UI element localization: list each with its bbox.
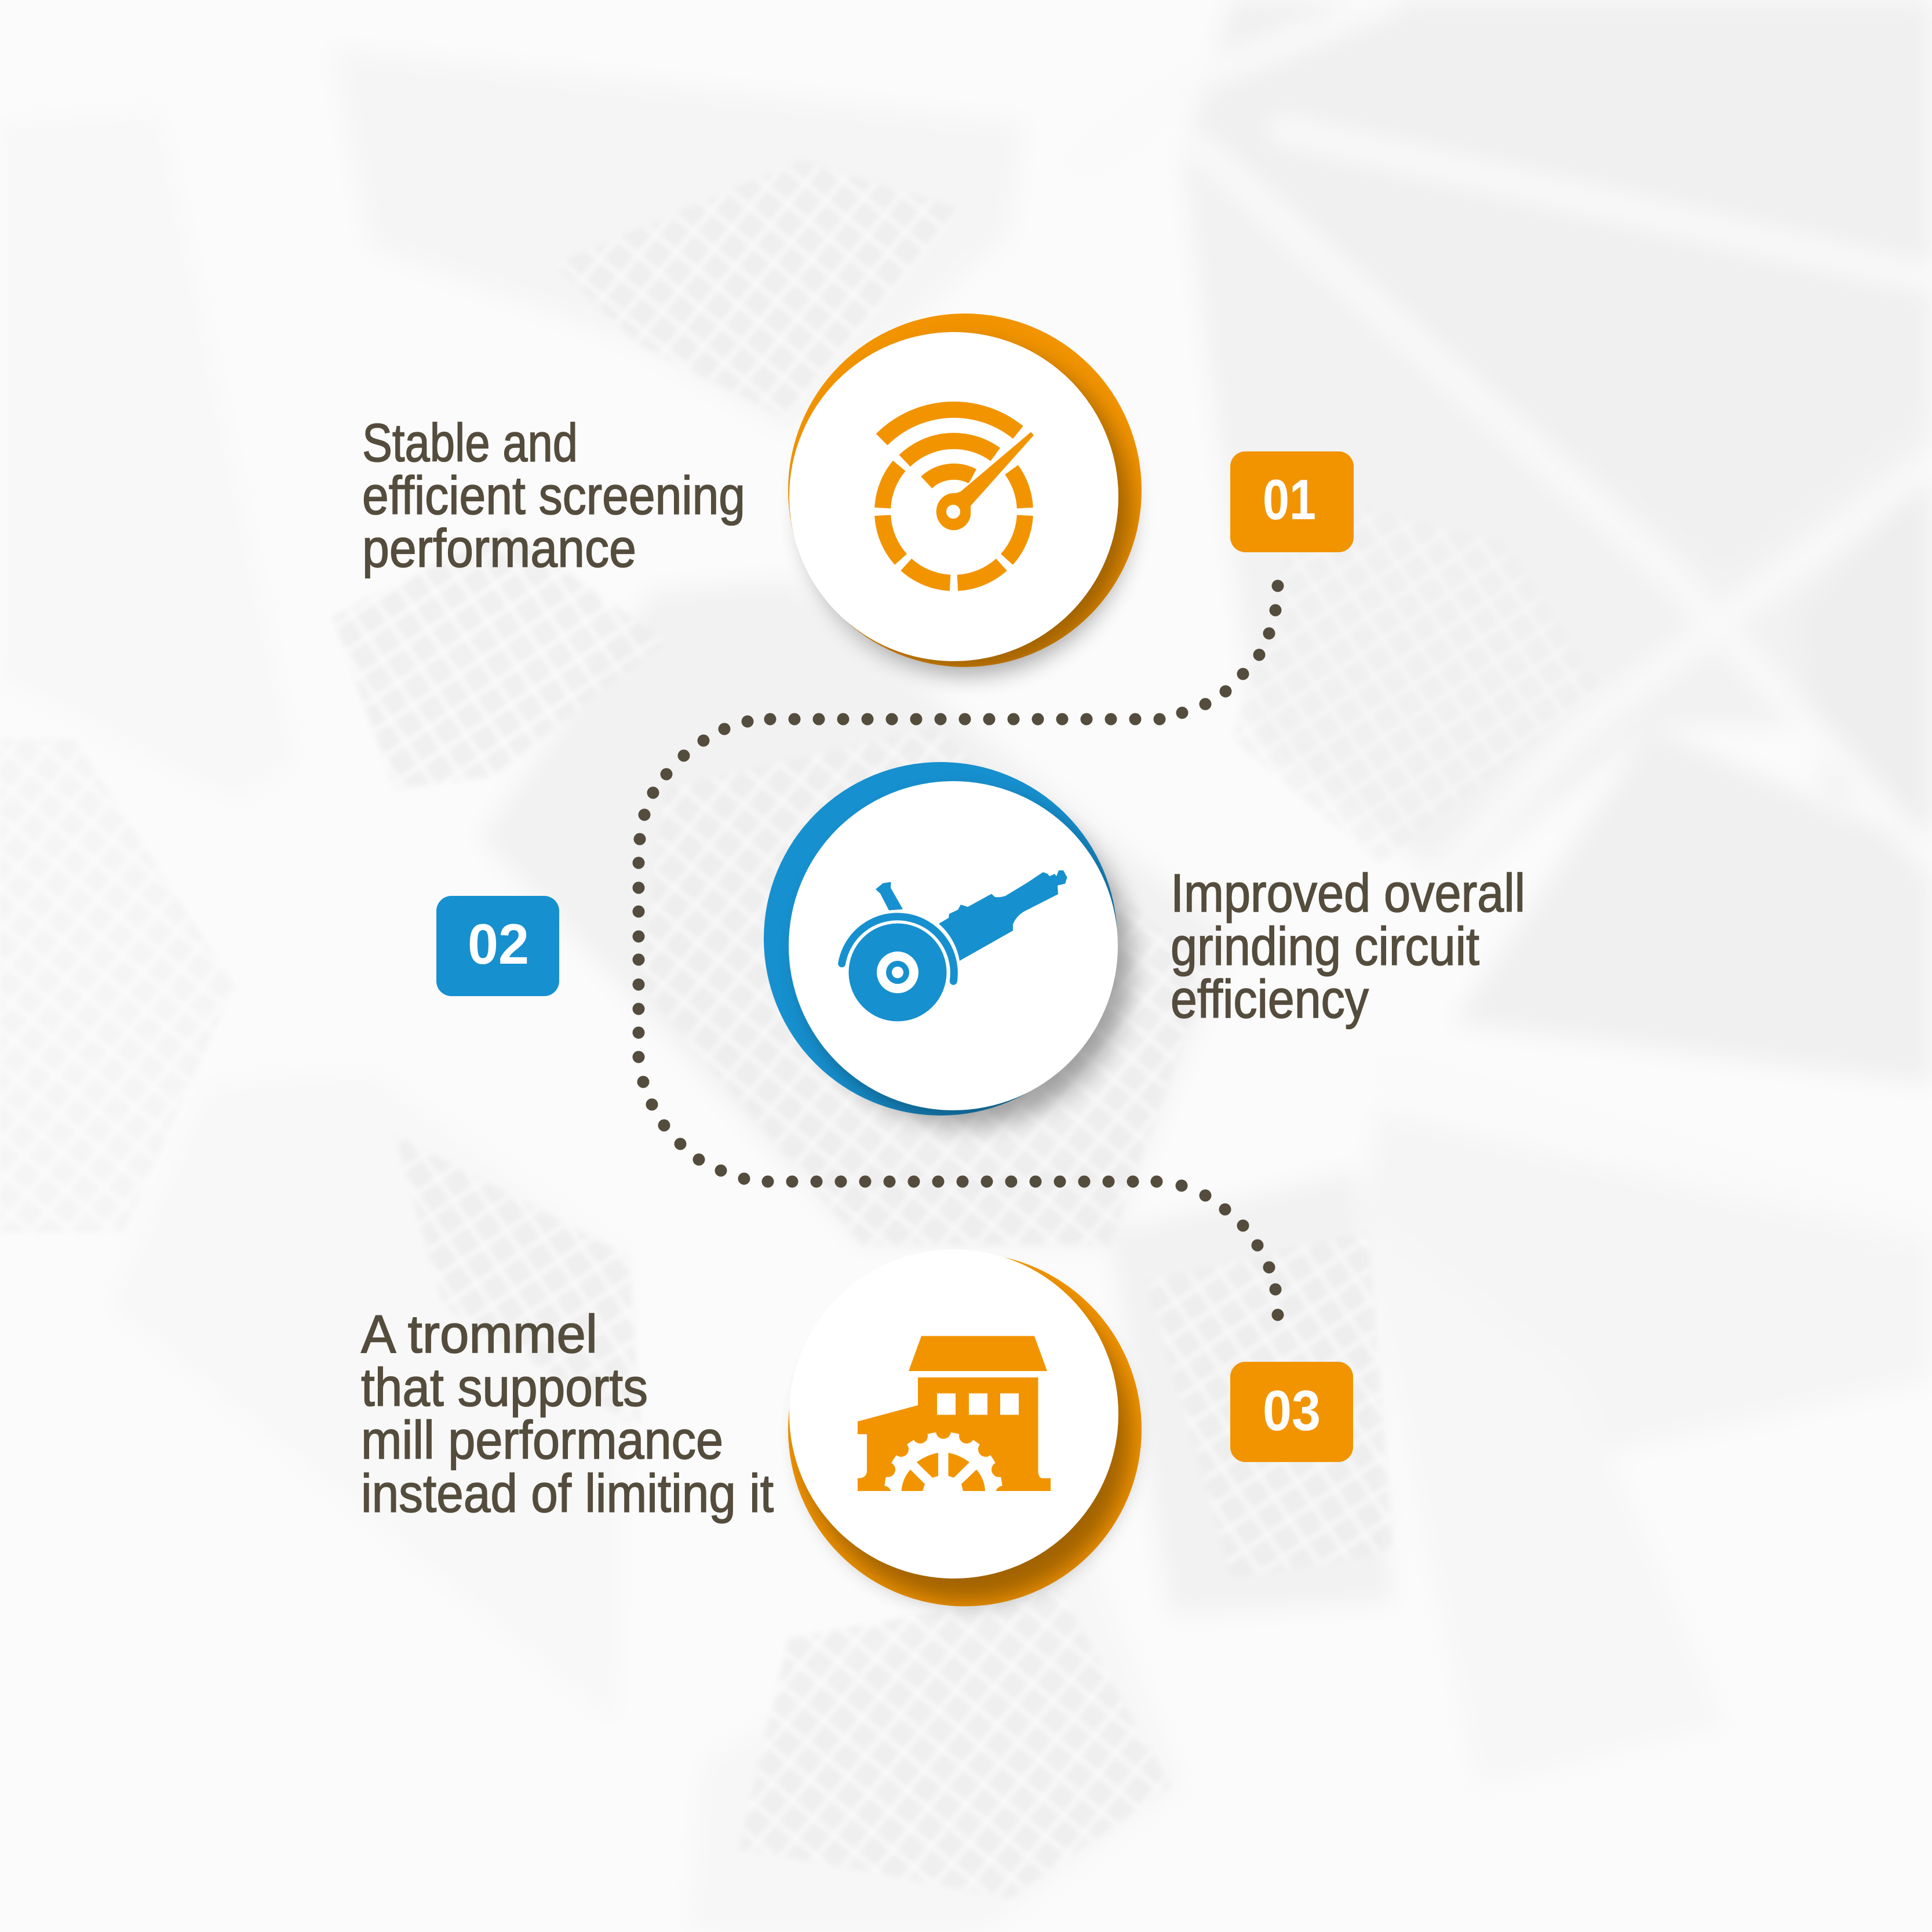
badge 02 (436, 896, 559, 996)
text: Improved overall grinding circuit efficiency: grinding circuit (1171, 916, 1479, 976)
icon: watermill (858, 1336, 1051, 1491)
badge 03 (1230, 1362, 1353, 1462)
text: A trommel that supports mill performance instead of limiting it: that supports (361, 1357, 648, 1417)
text: A trommel that supports mill performance instead of limiting it: instead of limiting it (361, 1463, 774, 1523)
badge 01: 01 (1263, 468, 1316, 531)
text: Stable and efficient screening performance: efficient screening (362, 465, 745, 526)
text: A trommel that supports mill performance instead of limiting it (361, 1304, 774, 1523)
text: A trommel that supports mill performance instead of limiting it: mill performance (361, 1410, 723, 1470)
text: Stable and efficient screening performance: performance (362, 518, 636, 578)
blue backing disc (764, 762, 1117, 1116)
step 3: watermill circle (788, 1249, 1142, 1606)
connector: dotted path from 01 to 02 (634, 579, 1284, 845)
connector: dotted path from 02 to 03 (633, 856, 1284, 1321)
text: Stable and efficient screening performance: Stable and (362, 413, 578, 473)
text: Stable and efficient screening performance (362, 413, 745, 578)
text: Improved overall grinding circuit efficiency: efficiency (1171, 969, 1369, 1029)
shadow 3 (802, 1273, 1131, 1602)
shadow 1 (802, 346, 1131, 675)
white disc 3 (789, 1249, 1118, 1579)
text: Improved overall grinding circuit efficiency: Improved overall (1171, 863, 1525, 923)
step 2: grinder circle (764, 762, 1131, 1125)
white disc 2 (789, 781, 1118, 1110)
orange backing disc 1 (788, 314, 1142, 667)
text: Improved overall grinding circuit efficiency (1171, 863, 1525, 1029)
white disc 1 (789, 332, 1118, 661)
orange backing disc 3 (788, 1253, 1142, 1606)
icon: angle grinder (842, 870, 1067, 1021)
icon: speedometer gauge (882, 410, 1034, 583)
badge 03: 03 (1263, 1379, 1321, 1442)
badge 02: 02 (468, 912, 529, 976)
text: A trommel that supports mill performance instead of limiting it: A trommel (361, 1304, 597, 1364)
shadow 2 (802, 796, 1131, 1125)
step 1: gauge circle (788, 314, 1142, 675)
badge 01 (1230, 451, 1354, 552)
